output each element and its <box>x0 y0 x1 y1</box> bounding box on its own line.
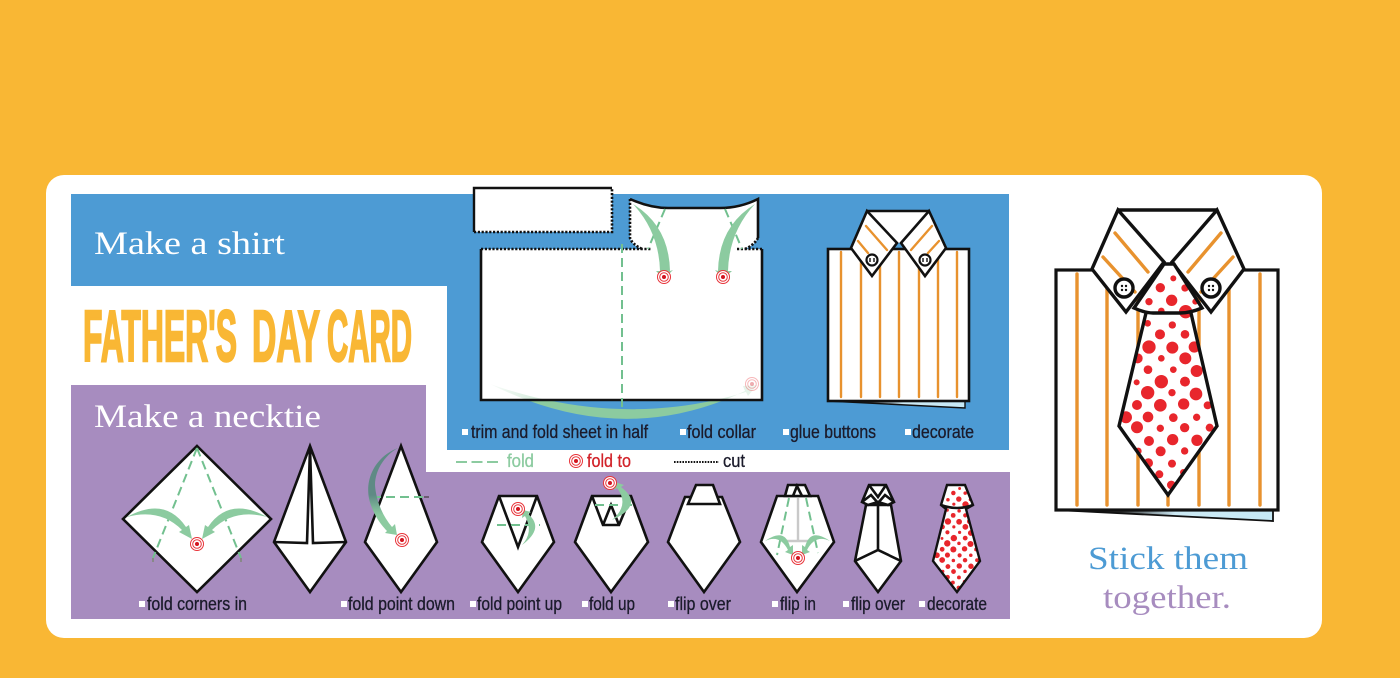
step labels: necktie: decorate <box>927 594 987 614</box>
icon: buttons <box>1115 279 1220 297</box>
diagram: trim and fold sheet <box>474 188 762 419</box>
diagram: finished shirt <box>828 211 969 408</box>
title: DAY <box>252 297 320 377</box>
necktie <box>1119 264 1217 495</box>
title: FATHER'S <box>83 297 237 377</box>
legend: cut <box>723 451 745 471</box>
legend: fold to <box>587 451 631 471</box>
step 9: decorated tie <box>933 485 980 592</box>
caption: stick them together <box>1088 541 1248 616</box>
step labels: shirt <box>462 422 974 442</box>
step labels: shirt: glue buttons <box>790 422 876 442</box>
step labels: necktie: fold corners in <box>147 594 247 614</box>
step labels: necktie: fold point down <box>348 594 455 614</box>
panel: make a shirt <box>71 188 1009 450</box>
step labels: necktie: flip in <box>780 594 816 614</box>
step 4: fold point up <box>482 496 554 592</box>
heading: make a necktie: Make a necktie <box>94 399 321 435</box>
step labels: necktie: flip over <box>851 594 905 614</box>
caption: stick them together: together. <box>1103 580 1231 616</box>
large finished card: shirt and tie <box>1056 210 1278 521</box>
step 3: fold point down <box>365 446 437 592</box>
panel: make a necktie <box>71 385 1010 619</box>
caption: stick them together: Stick them <box>1088 541 1248 577</box>
step 1: fold corners in <box>123 446 271 592</box>
text: CARD <box>327 297 412 377</box>
step labels: necktie <box>139 594 987 614</box>
step 2: folded kite <box>274 446 346 592</box>
heading: make a shirt: Make a shirt <box>94 226 285 262</box>
step labels: necktie: flip over <box>675 594 731 614</box>
white card <box>46 175 1322 638</box>
step labels: necktie: fold point up <box>477 594 562 614</box>
step labels: shirt: decorate <box>912 422 974 442</box>
step labels: shirt: fold collar <box>687 422 756 442</box>
step 8: flip over <box>855 485 901 592</box>
step 5: fold up <box>575 476 648 592</box>
step labels: necktie: fold up <box>589 594 635 614</box>
step 7: flip in <box>761 485 834 592</box>
legend <box>456 451 745 471</box>
step labels: shirt: trim and fold sheet in half <box>471 422 649 442</box>
legend: fold <box>507 451 534 471</box>
step 6: flip over <box>668 485 740 592</box>
